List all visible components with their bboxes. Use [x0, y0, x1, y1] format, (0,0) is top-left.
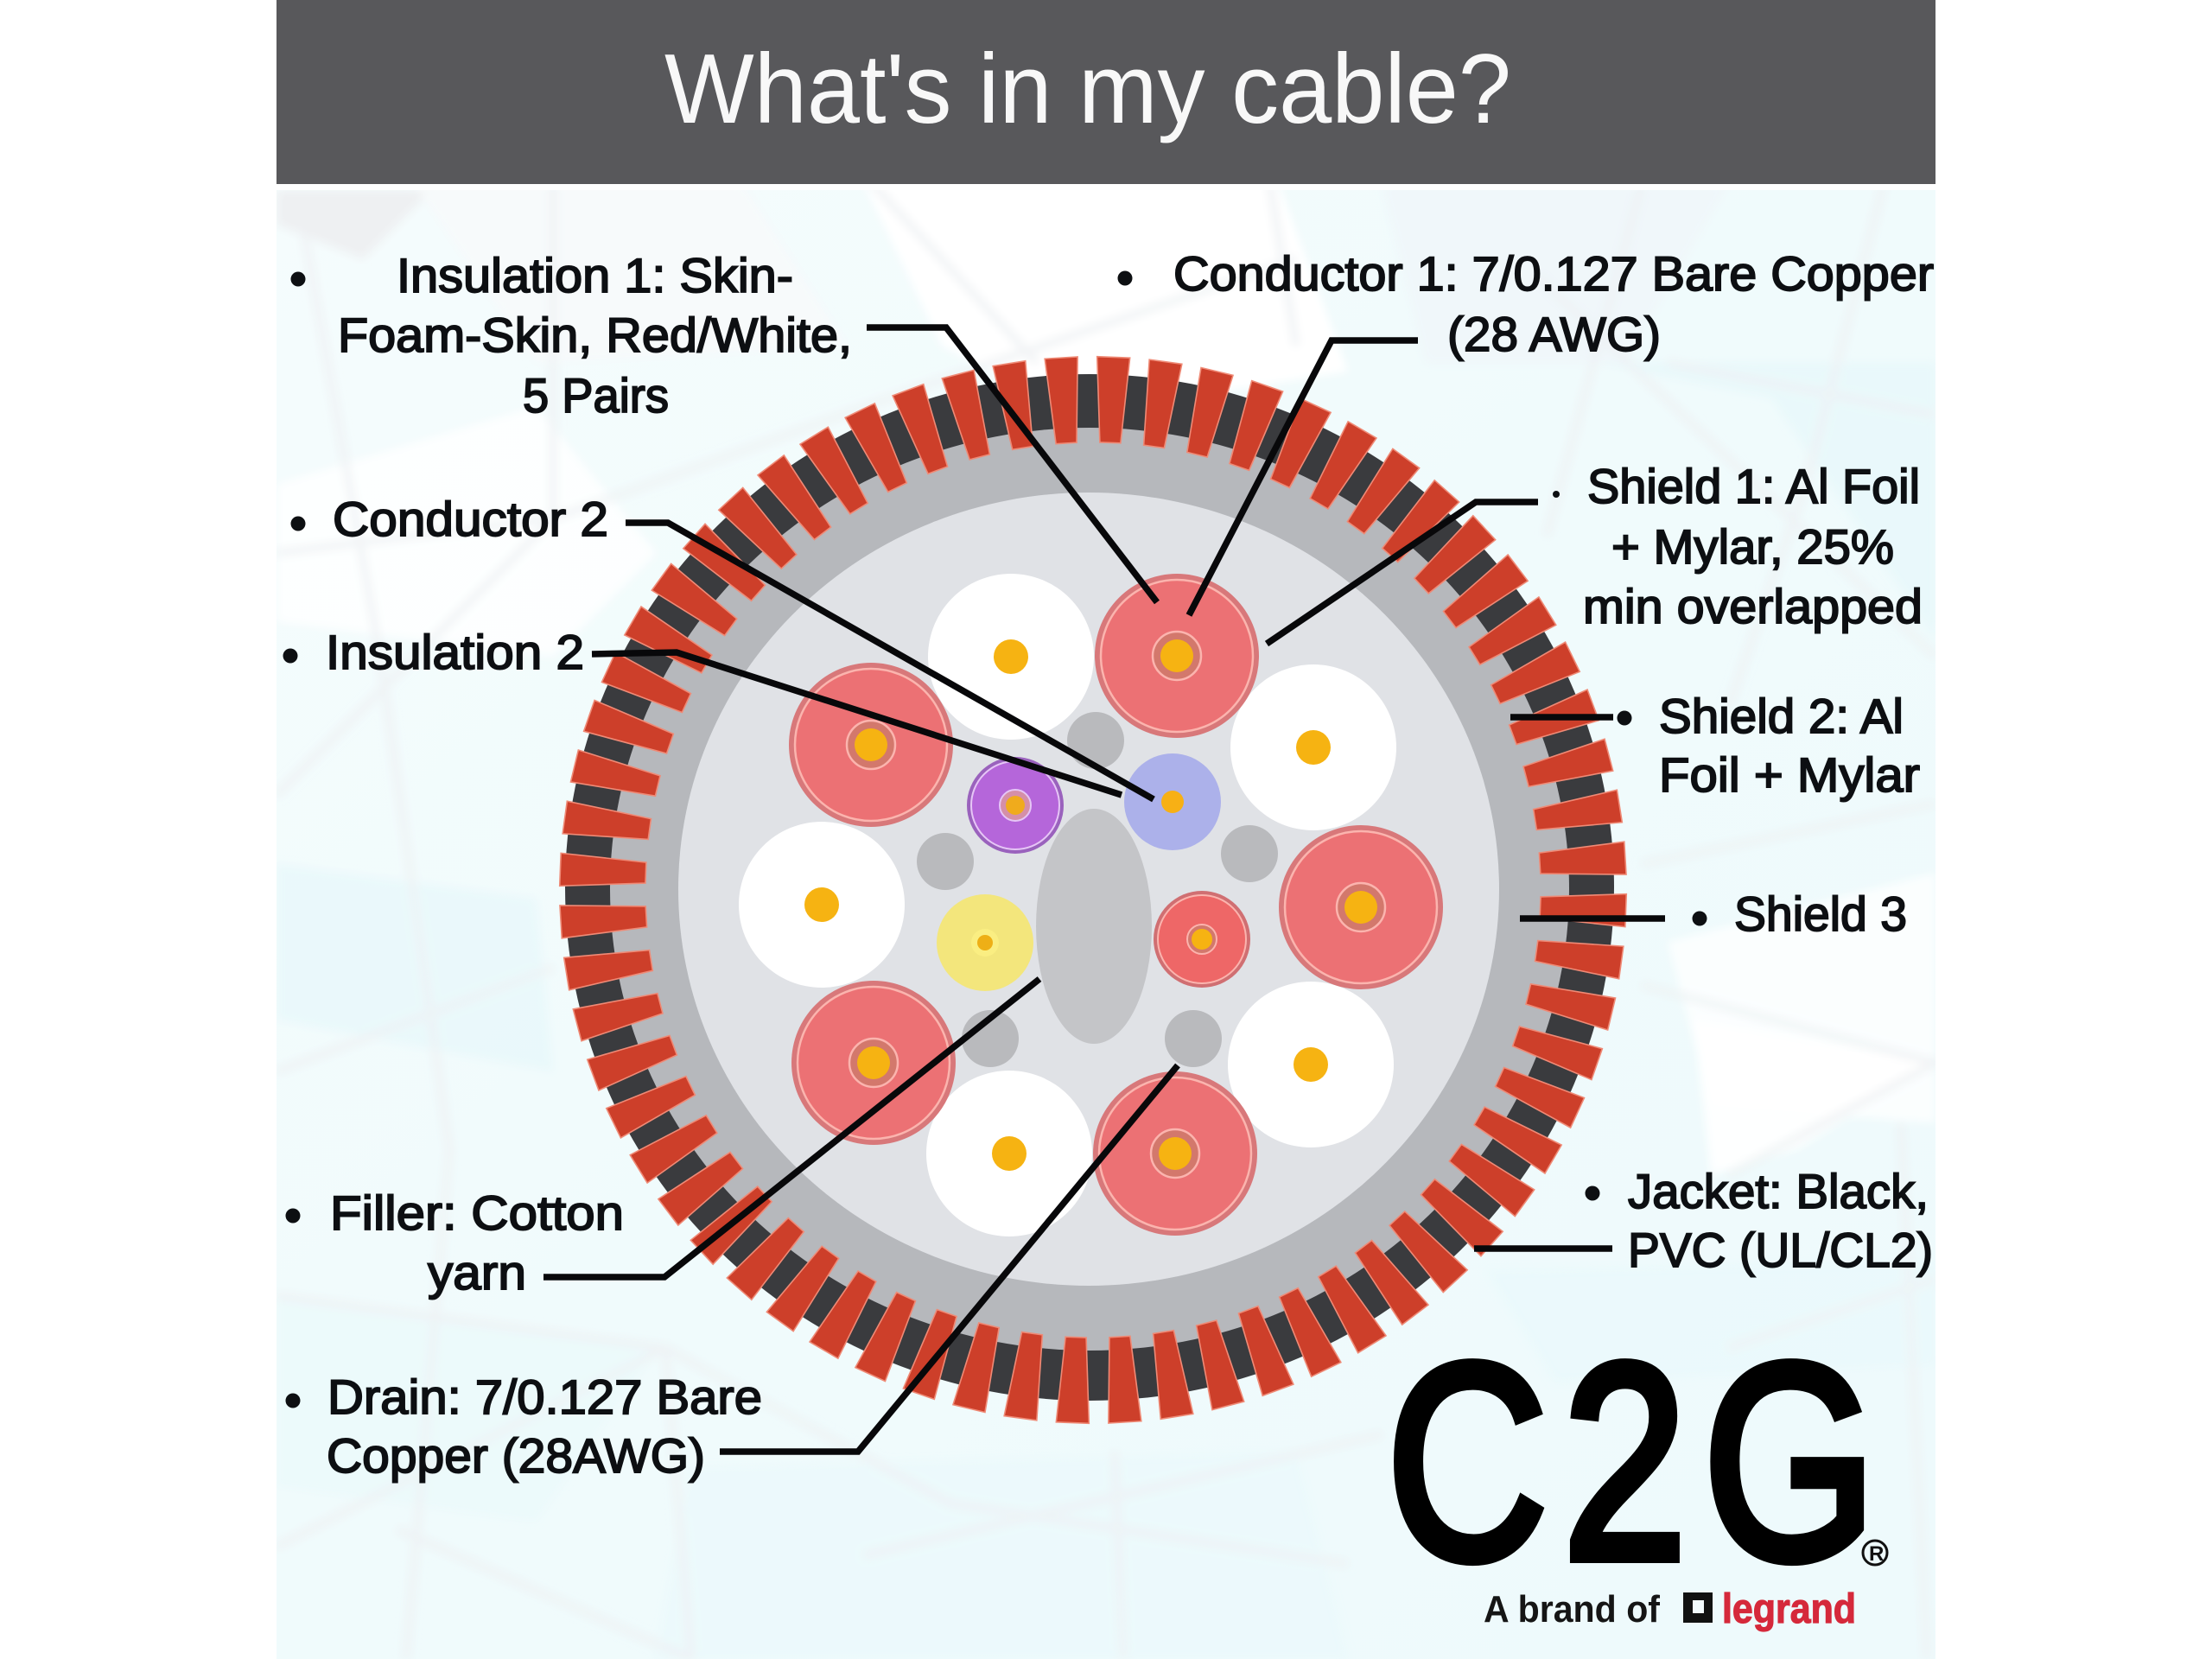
label: Shield 2: [1618, 689, 1920, 802]
shield ring: mid gray: [610, 428, 1569, 1351]
label: Drain: [285, 1370, 762, 1483]
label: Insulation 1: 5 Pairs: [523, 368, 669, 423]
title: What's in my cable?: [664, 35, 1511, 144]
label: Conductor 1: Conductor 1: 7/0.127 Bare Copper: [1173, 246, 1934, 301]
leader line: Filler: [543, 979, 1039, 1277]
cable cross-section: [560, 357, 1626, 1423]
registered mark: R: [1869, 1542, 1884, 1566]
label: Insulation 1: Insulation 1: Skin-: [397, 248, 793, 302]
wordmark: C2G: [1387, 1306, 1877, 1617]
leader line: Conductor 1: [1189, 340, 1418, 615]
label: Shield 1: + Mylar, 25%: [1611, 519, 1894, 574]
label: Conductor 1: (28 AWG): [1447, 307, 1661, 361]
title bar: [276, 0, 1936, 184]
label: Shield 1: min overlapped: [1583, 579, 1923, 633]
leader line: Conductor 2: [626, 523, 1154, 799]
label: Shield 3: Shield 3: [1734, 887, 1907, 941]
jacket ring: dark band: [565, 374, 1614, 1401]
yellow conductor: [937, 894, 1033, 991]
small red conductor: [1154, 891, 1250, 988]
leader line: Drain: [720, 1065, 1178, 1452]
leader line: Shield 2: [1510, 714, 1613, 721]
red insulated conductors: [789, 574, 1443, 1236]
label: Shield 1: Shield 1: Al Foil: [1587, 459, 1920, 513]
label: Insulation 2: Insulation 2: [326, 625, 584, 679]
label: Jacket: Jacket: Black,: [1628, 1164, 1929, 1218]
label: Insulation 1: [290, 248, 852, 423]
label: Conductor 2: Conductor 2: [333, 492, 608, 546]
label: Conductor 1: [1118, 246, 1934, 361]
drain wires: gray dots: [917, 712, 1278, 1067]
leader line: Shield 3: [1520, 915, 1665, 922]
infographic canvas: [276, 0, 1936, 1659]
leader line: Insulation 2: [592, 652, 1122, 795]
legrand wordmark: legrand: [1722, 1586, 1856, 1632]
label: Shield 1: [1553, 459, 1923, 633]
label: Shield 2: Foil + Mylar: [1659, 747, 1920, 802]
central cotton filler: [1036, 809, 1152, 1044]
registered mark: [1863, 1541, 1887, 1566]
label: Filler: yarn: [428, 1245, 526, 1300]
leader line: Insulation 1: [867, 327, 1157, 602]
blue conductor: [1124, 753, 1221, 850]
braid teeth: red shield strands: [560, 357, 1626, 1423]
purple conductor: [967, 757, 1064, 854]
leader line: Shield 1: [1267, 502, 1538, 644]
label: Filler: [285, 1185, 624, 1300]
legrand square icon: [1683, 1592, 1713, 1623]
label: Jacket: [1585, 1164, 1933, 1277]
label: Drain: Drain: 7/0.127 Bare: [327, 1370, 762, 1424]
label: Insulation 1: Foam-Skin, Red/White,: [338, 308, 852, 362]
tagline: A brand of: [1484, 1588, 1660, 1630]
label: Shield 2: Shield 2: Al: [1659, 689, 1904, 743]
inner filler area: light gray: [678, 493, 1499, 1286]
leader line: Jacket: [1474, 1245, 1612, 1252]
label: Drain: Copper (28AWG): [327, 1428, 705, 1483]
background: pale faceted pattern: [276, 184, 1936, 1659]
C2G logo: [1387, 1306, 1887, 1632]
white insulated conductors: [739, 574, 1396, 1236]
label: Filler: Filler: Cotton: [330, 1185, 624, 1240]
label: Jacket: PVC (UL/CL2): [1628, 1223, 1933, 1277]
